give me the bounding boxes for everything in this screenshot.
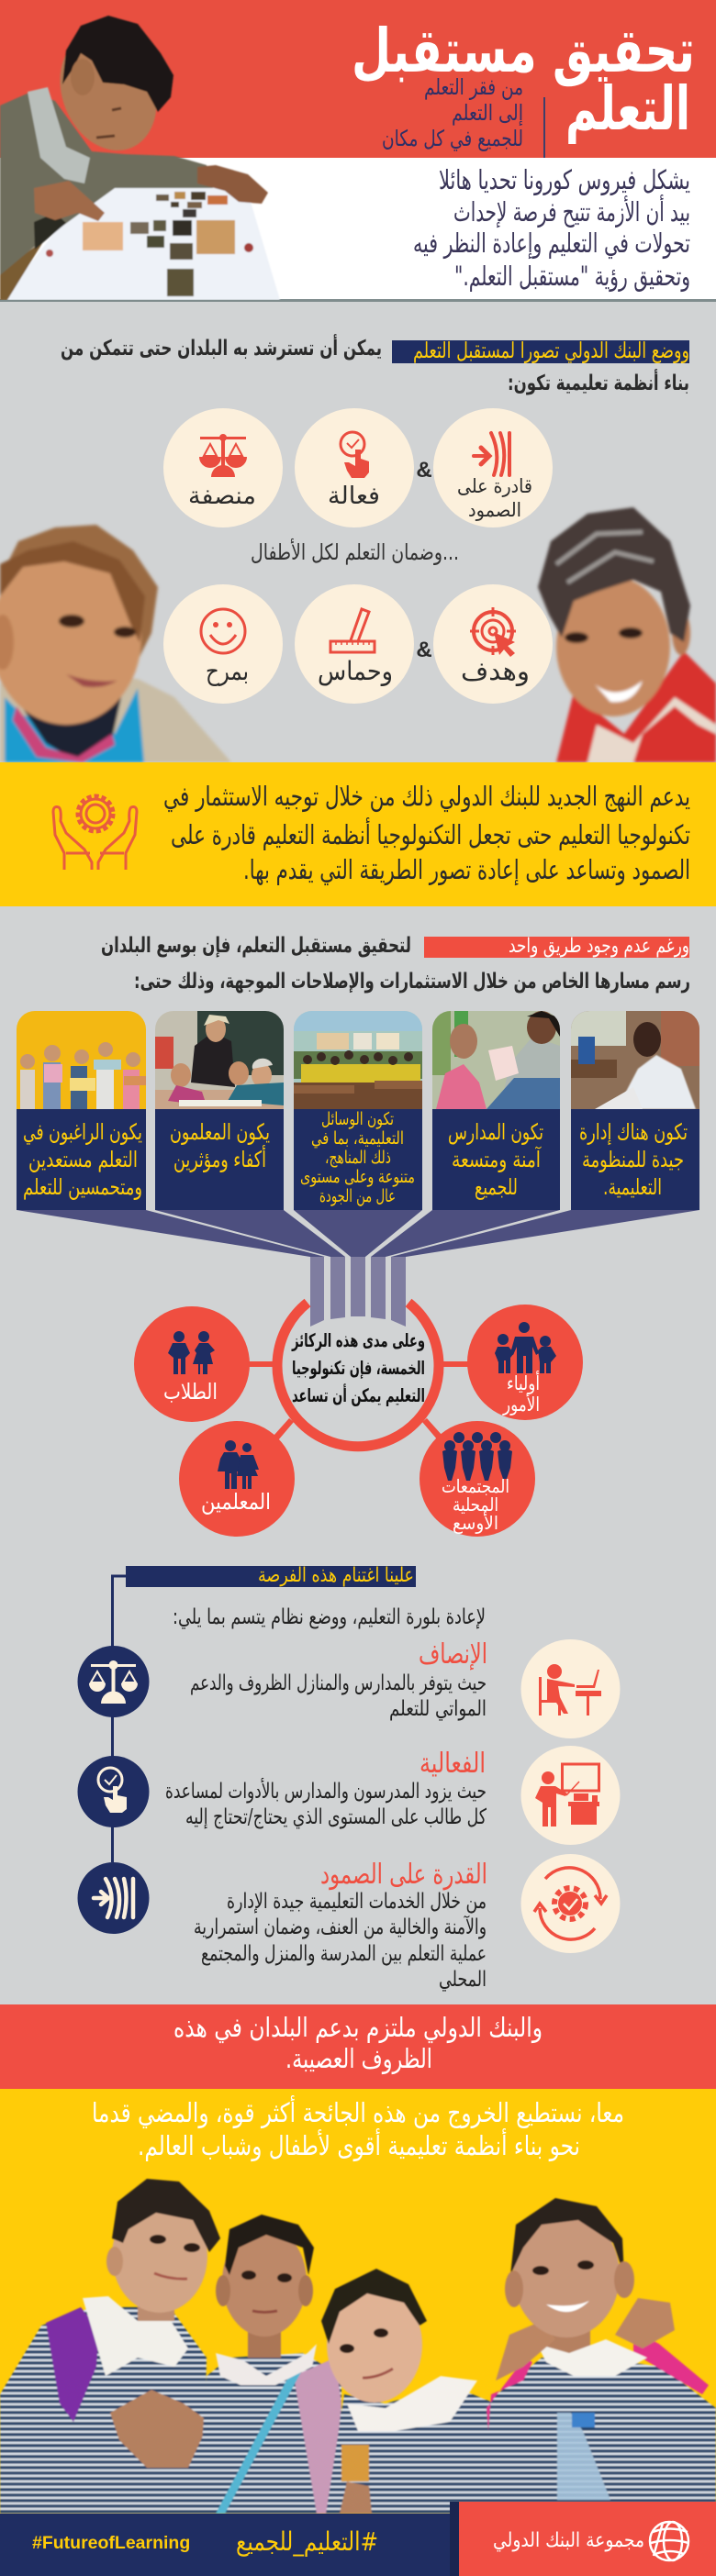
hub diagram — [134, 1303, 583, 1537]
card text: آمنة ومتسعة — [452, 1146, 542, 1172]
card: teachers — [155, 1011, 284, 1210]
card text: التعليمية. — [603, 1174, 662, 1200]
intro panel — [0, 158, 716, 302]
logo name: مجموعة البنك الدولي — [493, 2529, 644, 2552]
yellow panel: new approach — [0, 762, 716, 906]
yellow panel: closing — [0, 2089, 716, 2576]
hub ring — [277, 1303, 439, 1447]
girl three — [321, 2269, 496, 2514]
circle: effective — [295, 408, 414, 527]
hashtag: english: #FutureofLearning — [32, 2533, 190, 2553]
photo: teacher with pupils — [155, 1011, 284, 1109]
subtitle: للجميع في كل مكان — [382, 126, 523, 151]
circle: resilient — [433, 408, 553, 527]
card: safe schools — [432, 1011, 560, 1210]
girl one — [0, 2179, 220, 2514]
circle: wider communities: المحلية — [453, 1493, 498, 1516]
card text — [155, 1109, 284, 1210]
icon: navy click — [77, 1756, 149, 1827]
card: good management — [571, 1011, 699, 1210]
ampersand: & — [416, 458, 432, 483]
text: resilience: والآمنة والخالية من العنف، وضمان استمرارية — [194, 1915, 487, 1939]
circle: resilient: قادرة على — [457, 475, 532, 497]
red band: commitment: والبنك الدولي ملتزم بدعم البلدان في هذه — [173, 2012, 543, 2044]
icon: students — [168, 1331, 215, 1374]
text: equity: حيث يتوفر بالمدارس والمنازل الظروف والدعم — [190, 1671, 487, 1695]
icon: smile — [201, 609, 245, 653]
card: learners — [17, 1011, 146, 1210]
photo: four schoolgirls — [0, 2179, 716, 2514]
vision intro text — [61, 333, 689, 395]
card text: ذلك المناهج، — [325, 1148, 391, 1168]
circle: equitable — [163, 408, 283, 527]
hub text: التعليم يمكن أن تساعد — [292, 1382, 425, 1406]
red label — [424, 935, 689, 958]
text: resilience: المحلي — [439, 1968, 487, 1992]
timeline line — [112, 1576, 126, 1862]
icon: teachers — [218, 1440, 259, 1489]
hub text: الخمسة، فإن تكنولوجيا — [292, 1357, 425, 1379]
circle: students: الطلاب — [163, 1379, 218, 1405]
row: equity — [77, 1638, 621, 1738]
icon: ruler and pencil — [330, 609, 375, 652]
photo: boy reading — [0, 16, 280, 300]
text: equity: المواتي للتعلم — [389, 1697, 487, 1721]
circle: students — [134, 1306, 250, 1422]
section text: لتحقيق مستقبل التعلم، فإن بوسع البلدان — [101, 934, 411, 958]
card text: أكفاء ومؤثرين — [173, 1145, 266, 1172]
navy label — [126, 1564, 416, 1587]
red band: commitment: الظروف العصيبة. — [285, 2043, 432, 2074]
red band: commitment — [0, 2004, 716, 2089]
photo: teacher and girl — [432, 1011, 560, 1109]
title divider — [543, 97, 545, 158]
photo: student in white coat — [571, 1011, 699, 1109]
circle: effective: فعالة — [328, 483, 380, 510]
circle: wider communities: الأوسع — [453, 1512, 498, 1534]
subtitle: من فقر التعلم — [424, 74, 523, 100]
card text: تكون المدارس — [448, 1119, 543, 1145]
circle: parents — [467, 1305, 583, 1420]
card text — [17, 1109, 146, 1210]
text: resilience: عملية التعلم بين المدرسة والمنزل والمجتمع — [201, 1942, 487, 1966]
icon: navy resilience — [77, 1862, 149, 1934]
icon: gear with arrows — [521, 1854, 621, 1953]
funnel connectors — [17, 1210, 699, 1327]
text: effectiveness: حيث يزود المدرسون والمدارس بالأدوات لمساعدة — [165, 1778, 487, 1804]
circle: teachers — [179, 1421, 295, 1537]
icon: navy scales — [77, 1646, 149, 1717]
section: no single path heading — [101, 934, 690, 994]
text: effectiveness: الفعالية — [420, 1748, 486, 1780]
card text — [294, 1109, 422, 1210]
icon: target — [470, 607, 516, 657]
subtitle: إلى التعلم — [452, 100, 523, 127]
photo: children reading — [17, 1011, 146, 1109]
ampersand: & — [416, 638, 432, 662]
photo: boy portrait — [538, 507, 716, 762]
icon: resilience — [474, 433, 509, 475]
card text: يكون المعلمون — [170, 1119, 270, 1145]
text: effectiveness — [165, 1748, 487, 1829]
circle: passion: وحماس — [318, 656, 393, 686]
card text: التعلم مستعدين — [28, 1147, 138, 1172]
icon: community — [442, 1432, 512, 1481]
section text — [101, 934, 690, 994]
intro text — [413, 164, 690, 293]
lead text: لإعادة بلورة التعليم، ووضع نظام يتسم بما يلي: — [173, 1605, 486, 1629]
icon: student at desk — [521, 1639, 621, 1738]
title — [352, 16, 695, 144]
girl two — [197, 2215, 341, 2514]
hashtag: arabic: #التعليم_للجميع — [236, 2526, 378, 2557]
closing text — [92, 2094, 624, 2162]
subtitle — [382, 74, 523, 151]
photo: girl portrait — [0, 525, 231, 762]
circle: equitable: منصفة — [188, 483, 256, 510]
row: resilience — [77, 1854, 621, 1992]
circle: resilient: الصمود — [468, 499, 521, 521]
girl four — [477, 2198, 716, 2514]
text: resilience: من خلال الخدمات التعليمية جيدة الإدارة — [227, 1890, 487, 1914]
icon: hands holding gear — [53, 796, 137, 870]
circle: parents: الأمور — [502, 1393, 540, 1416]
section: seize this opportunity — [112, 1564, 486, 1862]
text: resilience — [194, 1859, 487, 1992]
row: effectiveness — [77, 1746, 621, 1845]
card text — [432, 1109, 560, 1210]
navy label: علينا اغتنام هذه الفرصة — [258, 1564, 414, 1587]
text: equity: الإنصاف — [419, 1638, 487, 1671]
section: vision for the future of learning — [61, 333, 689, 395]
text: new approach — [163, 781, 690, 886]
world bank logo panel — [459, 2502, 716, 2576]
circle: joy — [163, 584, 283, 704]
circle: purpose — [433, 584, 553, 704]
qualities row one — [163, 408, 553, 527]
card text: تكون الوسائل — [321, 1109, 394, 1129]
circle: passion — [295, 584, 414, 704]
text: ensuring learning for all children: ...وضمان التعلم لكل الأطفال — [251, 539, 459, 565]
card text: ومتحمسين للتعلم — [23, 1174, 142, 1200]
card text: متنوعة وعلى مستوى — [300, 1167, 415, 1187]
text: equity — [190, 1638, 487, 1721]
closing text: نحو بناء أنظمة تعليمية أقوى لأطفال وشباب العالم. — [138, 2127, 580, 2162]
card: learning resources — [294, 1011, 422, 1210]
circle: wider communities: المجتمعات — [442, 1475, 509, 1497]
card text: يكون الراغبون في — [23, 1119, 142, 1145]
card text: التعليمية، بما في — [311, 1128, 404, 1149]
qualities row two — [163, 584, 553, 704]
text: effectiveness: كل طالب على المستوى الذي يحتاج/تحتاج إليه — [185, 1805, 487, 1829]
icon: globe — [650, 2522, 688, 2560]
icon: scales — [199, 434, 247, 477]
icon: family — [495, 1322, 556, 1373]
footer bar — [0, 2502, 459, 2576]
circle: parents: أولياء — [507, 1371, 540, 1394]
vision intro text: يمكن أن تسترشد به البلدان حتى تتمكن من — [61, 333, 382, 361]
hub text — [291, 1329, 425, 1406]
header panel — [0, 0, 716, 158]
photo: classroom — [294, 1011, 422, 1109]
card text: للجميع — [475, 1174, 518, 1200]
card text: عال من الجودة — [319, 1186, 396, 1206]
circle: teachers: المعلمين — [201, 1489, 271, 1515]
text: resilience: القدرة على الصمود — [320, 1859, 487, 1891]
icon: teacher at board — [521, 1746, 621, 1845]
card text — [571, 1109, 699, 1210]
icon: click — [341, 432, 369, 478]
circle: joy: بمرح — [206, 656, 249, 686]
circle: wider communities — [420, 1421, 535, 1537]
circle: purpose: وهدف — [461, 656, 530, 686]
hub text: وعلى مدى هذه الركائز — [291, 1329, 425, 1351]
connectors — [248, 1361, 469, 1440]
card text: جيدة للمنظومة — [582, 1147, 684, 1172]
